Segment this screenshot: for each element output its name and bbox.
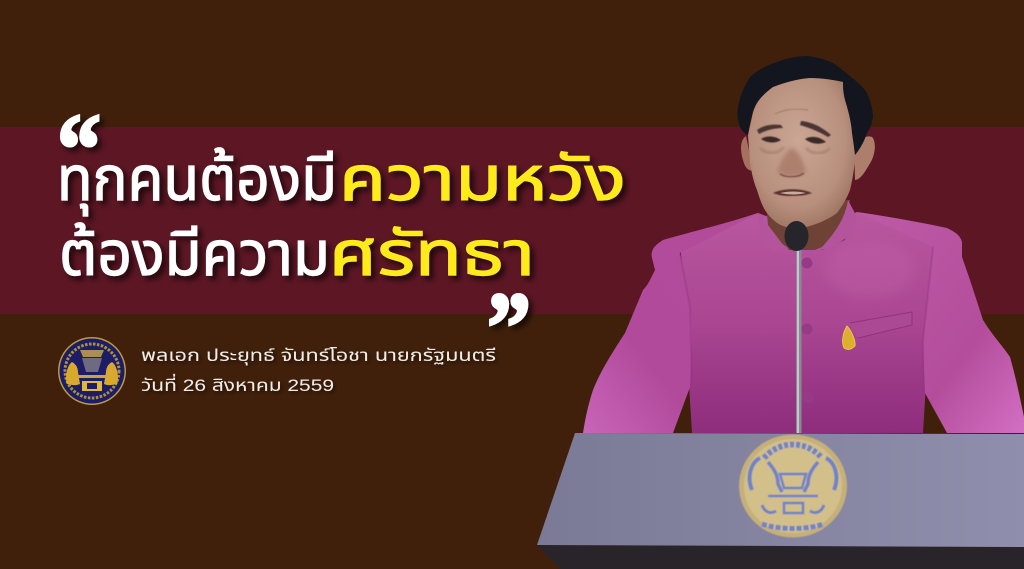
chest highlight <box>825 242 915 298</box>
forehead wrinkles <box>775 109 808 114</box>
speaker figure <box>583 56 1024 433</box>
headline line 2 <box>59 220 535 289</box>
buttons <box>802 258 814 403</box>
podium emblem <box>739 434 847 538</box>
headline line 1 <box>57 145 626 216</box>
headline line 2: ต้องมีความ <box>59 220 330 289</box>
eyes <box>761 136 781 143</box>
face <box>748 76 855 228</box>
closing quotation mark: ” <box>487 272 531 383</box>
pocket <box>850 312 912 338</box>
nose <box>777 148 806 176</box>
date: วันที่ 26 สิงหาคม 2559 <box>141 373 334 395</box>
podium front <box>537 545 1024 569</box>
jacket body <box>680 212 935 433</box>
collar <box>758 200 857 252</box>
headline line 1: ทุกคนต้องมี <box>57 145 337 216</box>
icon: government seal <box>58 337 126 405</box>
speaker name: พลเอก ประยุทธ์ จันทร์โอชา นายกรัฐมนตรี <box>141 346 496 366</box>
left ear <box>741 136 753 171</box>
sleeve seams <box>680 247 933 392</box>
microphone <box>784 221 808 433</box>
right sleeve <box>857 212 1024 433</box>
podium <box>537 433 1024 569</box>
headline line 2: ศรัทธา <box>329 220 535 289</box>
hair <box>737 56 873 155</box>
opening quotation mark: “ <box>57 93 101 204</box>
headline line 1: ความหวัง <box>339 145 626 214</box>
mouth <box>773 189 812 196</box>
pin badge <box>843 326 855 349</box>
eye pouches <box>760 147 830 153</box>
brows <box>757 125 783 134</box>
left sleeve <box>583 213 758 433</box>
podium top <box>537 433 1024 547</box>
maroon band <box>0 127 1024 314</box>
attribution text <box>141 346 496 395</box>
headline <box>57 145 626 289</box>
right ear <box>854 136 875 180</box>
neck <box>766 200 850 250</box>
